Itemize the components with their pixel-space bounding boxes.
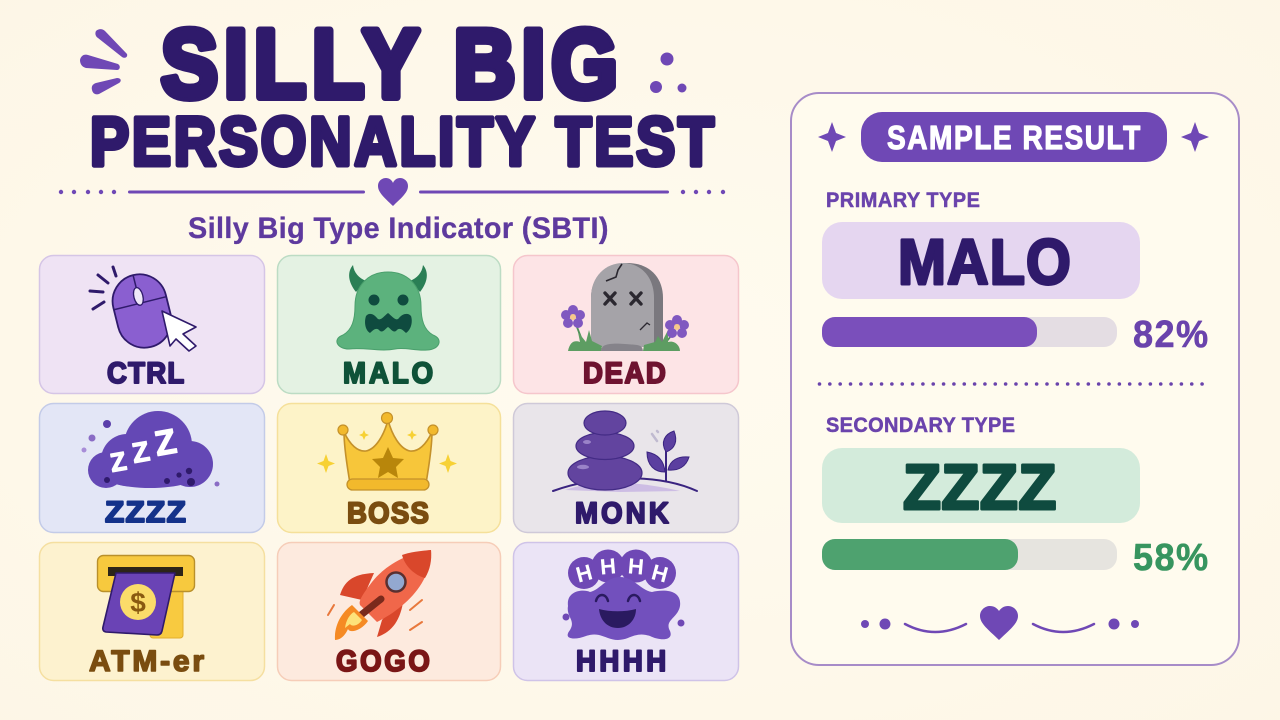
ornament: dots curves and heart: [861, 606, 1139, 640]
divider with heart: [59, 178, 725, 206]
title: SILLY BIG: [161, 10, 618, 118]
icon: left burst strokes: [80, 29, 127, 94]
icon: laughing blob: [562, 550, 684, 640]
label: CTRL: CTRL: [107, 357, 184, 390]
icon: right sparkle: [1181, 122, 1209, 152]
icon: left sparkle: [818, 122, 846, 152]
result: ZZZZ: [822, 448, 1140, 523]
icon: tombstone with flowers: [561, 263, 689, 351]
icon: golden crown: [317, 412, 457, 490]
title: [90, 10, 714, 180]
panel: DEAD card: [514, 256, 738, 394]
panel: sample result: [791, 93, 1239, 665]
label: secondary type: SECONDARY TYPE: [826, 414, 1015, 437]
label: MALO: MALO: [343, 357, 433, 390]
label: HHHH: HHHH: [576, 645, 666, 678]
badge: sample result: [861, 112, 1167, 162]
icon: computer mouse and cursor: [90, 267, 196, 353]
icon: sleeping cloud: Z: [152, 422, 179, 464]
icon: rocket: [328, 550, 431, 640]
icon: ATM with bill: [98, 556, 194, 638]
icon: laughing blob: H: [649, 559, 671, 588]
label: ZZZZ: ZZZZ: [105, 495, 186, 529]
panel: BOSS card: [278, 404, 500, 532]
panel: GOGO card: [278, 542, 500, 680]
label: MONK: MONK: [575, 497, 669, 530]
badge: sample result: SAMPLE RESULT: [887, 120, 1141, 157]
label: ATM-er: ATM-er: [89, 645, 204, 678]
bar: primary 82%: [822, 317, 1117, 347]
value: 58%: 58%: [1133, 535, 1208, 578]
icon: laughing blob: H: [599, 553, 617, 580]
icon: right dots: [650, 52, 686, 93]
result: MALO: [822, 222, 1140, 299]
value: 82%: 82%: [1133, 312, 1208, 355]
icon: ATM with bill: $: [130, 587, 146, 618]
icon: sleeping cloud: Z: [130, 435, 152, 469]
panel: ZZZZ card: [40, 404, 264, 532]
panel: MALO card: [278, 256, 500, 394]
icon: stacked stones and plant: [553, 411, 697, 492]
label: primary type: PRIMARY TYPE: [826, 189, 980, 212]
icon: laughing blob: H: [573, 559, 595, 588]
dotted divider: [820, 382, 1212, 386]
panel: HHHH card: [514, 542, 738, 680]
title: PERSONALITY TEST: [90, 103, 714, 180]
icon: sleeping cloud: Z: [108, 446, 129, 478]
icon: sleeping cloud: [82, 411, 220, 488]
panel: CTRL card: [40, 256, 264, 394]
result: ZZZZ: ZZZZ: [903, 452, 1056, 523]
label: DEAD: DEAD: [583, 357, 666, 390]
bar: secondary 58%: [822, 539, 1117, 570]
label: GOGO: GOGO: [336, 645, 430, 678]
result: MALO: MALO: [898, 226, 1071, 298]
label: BOSS: BOSS: [347, 497, 429, 530]
panel: ATM-er card: [40, 542, 264, 680]
icon: laughing blob: H: [627, 553, 645, 580]
icon: green monster: [337, 265, 439, 350]
panel: MONK card: [514, 404, 738, 532]
subtitle: Silly Big Type Indicator (SBTI): [188, 211, 608, 245]
